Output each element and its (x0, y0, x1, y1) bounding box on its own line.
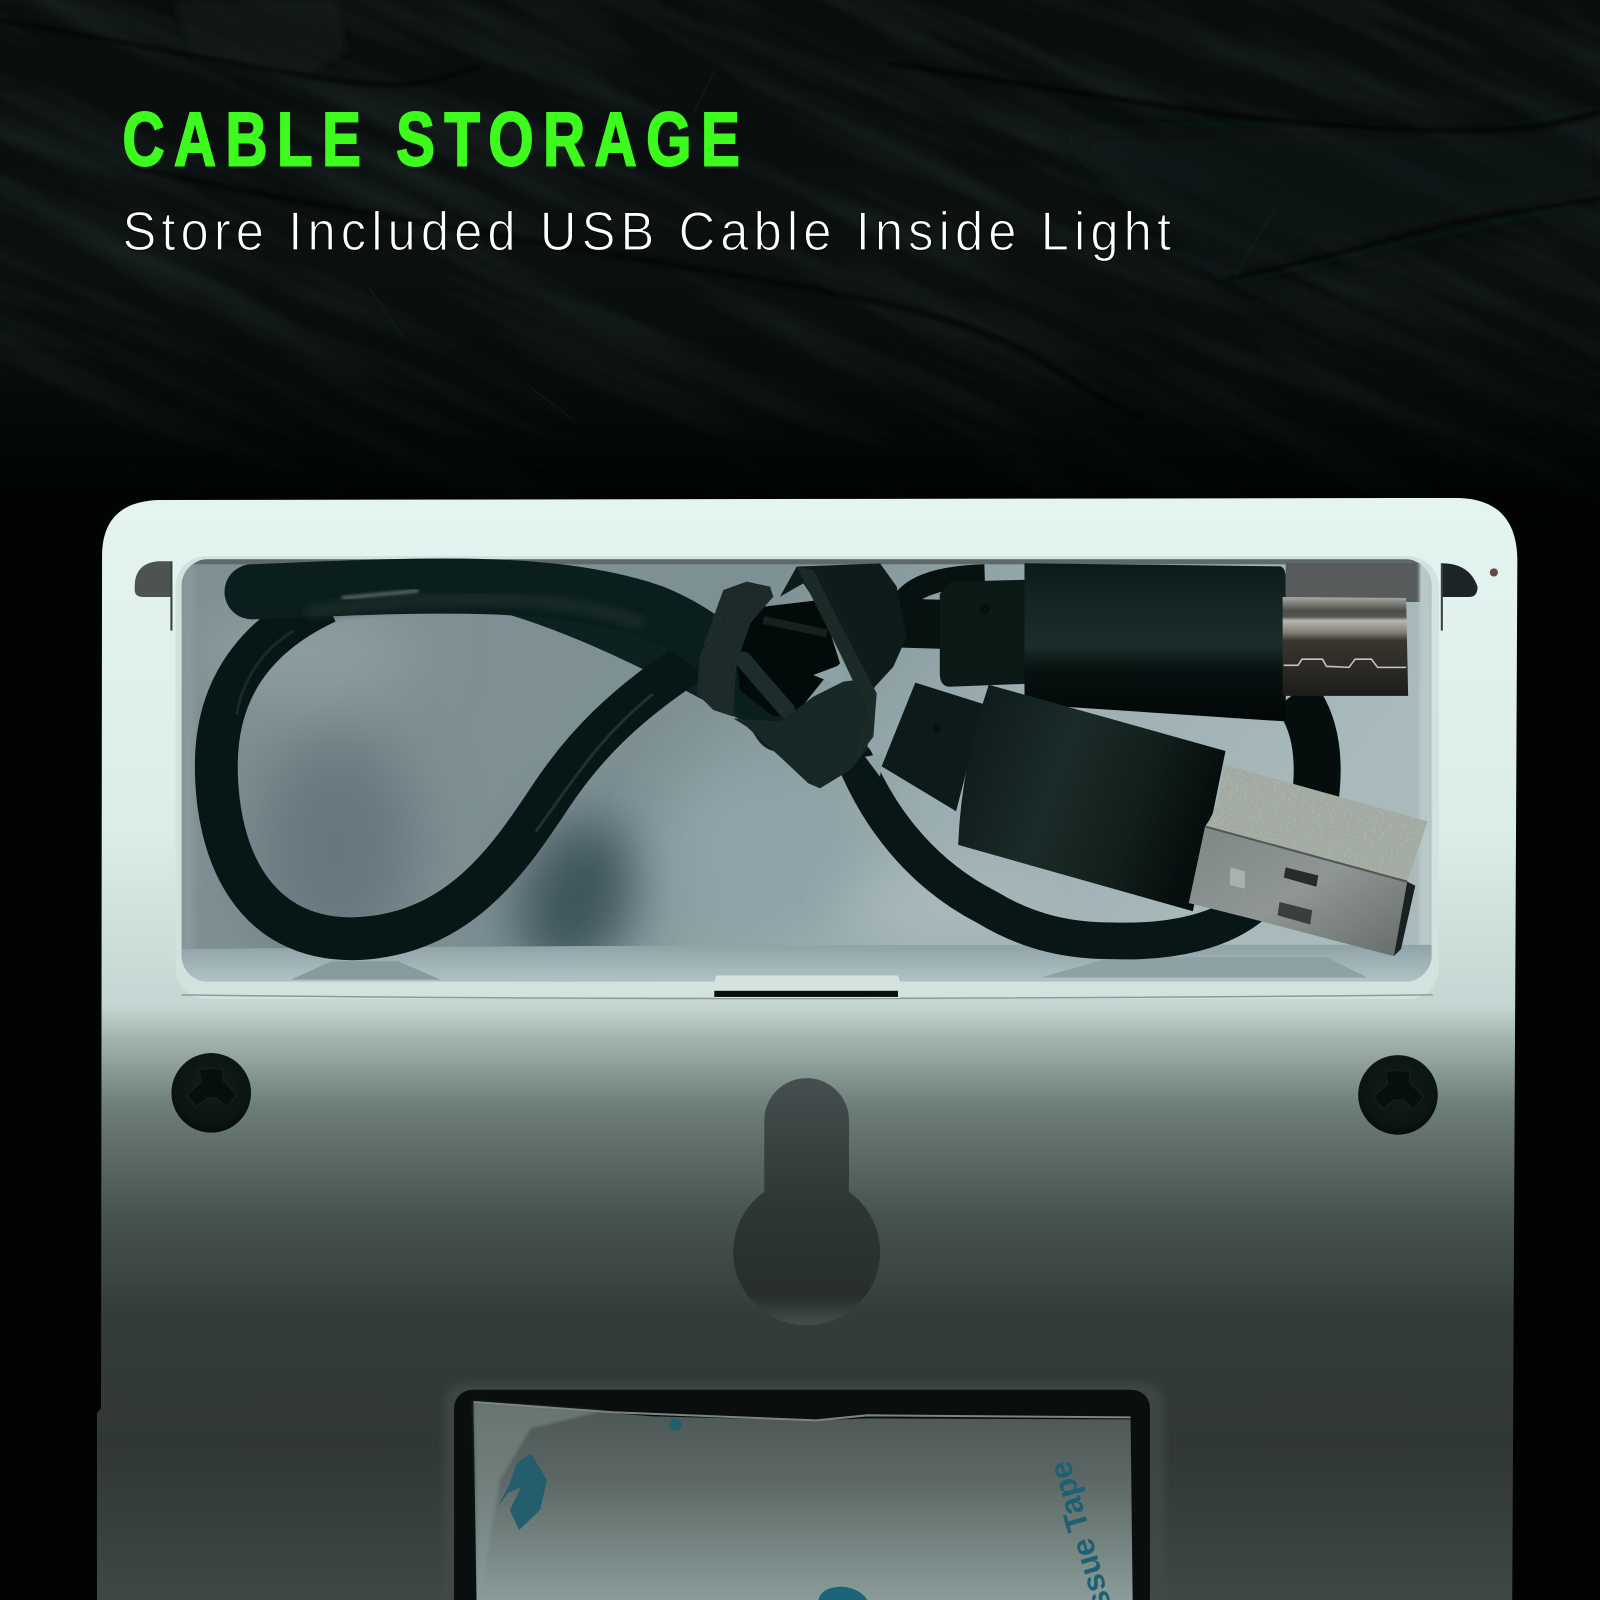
cable: top strand (252, 586, 781, 724)
adhesive tape pad (444, 1383, 1164, 1600)
cable: main loop (216, 602, 704, 939)
screw right (1358, 1055, 1438, 1135)
micro usb connector (940, 563, 1408, 721)
screw left (171, 1053, 251, 1133)
cable ties: leather knot (697, 563, 907, 788)
left corner slot (135, 561, 172, 631)
cable: stub to micro connector (878, 622, 949, 624)
cable: lower run (855, 760, 1255, 941)
usb-a connector (882, 683, 1428, 956)
product: light body back (97, 498, 1517, 1600)
tape print marks (498, 1418, 867, 1600)
interior shading (182, 559, 1432, 994)
subtitle: Store Included USB Cable Inside Light (122, 201, 1171, 262)
right corner slot (1441, 563, 1498, 631)
compartment surround lip (176, 556, 1439, 999)
keyhole mounting slot (733, 1078, 880, 1325)
title: CABLE STORAGE (122, 97, 740, 182)
center notch (714, 976, 900, 998)
compartment floor (182, 945, 1432, 982)
cable: upper curve to connector (903, 576, 985, 602)
background: dark painted texture (0, 0, 1600, 448)
cable: rear strand (500, 590, 776, 714)
usb cable (216, 576, 1317, 941)
cable storage compartment (182, 559, 1432, 994)
cable: rear arc behind connectors (1294, 694, 1317, 806)
